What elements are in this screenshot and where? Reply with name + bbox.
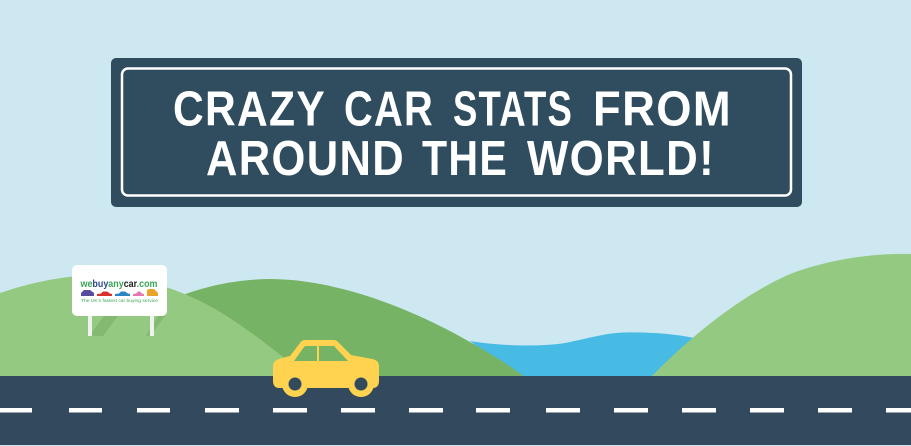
hill: light green left [0, 275, 307, 377]
title: WORLD! [527, 132, 715, 186]
billboard panel [72, 265, 167, 316]
car windows [294, 346, 317, 361]
car [273, 340, 379, 397]
road dashes [0, 408, 911, 412]
title: STATS [453, 82, 573, 136]
title sign [111, 58, 802, 207]
billboard posts [88, 314, 154, 336]
billboard [72, 265, 167, 336]
sign panel [111, 58, 802, 207]
title: THE [422, 132, 508, 186]
car wheel arches [282, 371, 308, 397]
title: CRAZY [173, 82, 326, 136]
logo text: webuyanycar.com [80, 279, 158, 290]
lake [470, 332, 694, 378]
car body [273, 340, 379, 388]
road [0, 376, 911, 445]
sign border [122, 68, 791, 196]
hill: dark green centre [170, 279, 525, 377]
logo tagline: The UK's fastest car buying service [81, 298, 159, 303]
title: FROM [593, 82, 732, 136]
title [173, 82, 732, 186]
car wheels [288, 378, 302, 390]
title: AROUND [206, 132, 405, 186]
hill: light green right [651, 254, 911, 377]
title: CAR [344, 82, 434, 136]
logo cars [81, 289, 158, 296]
billboard shadow [89, 316, 165, 336]
